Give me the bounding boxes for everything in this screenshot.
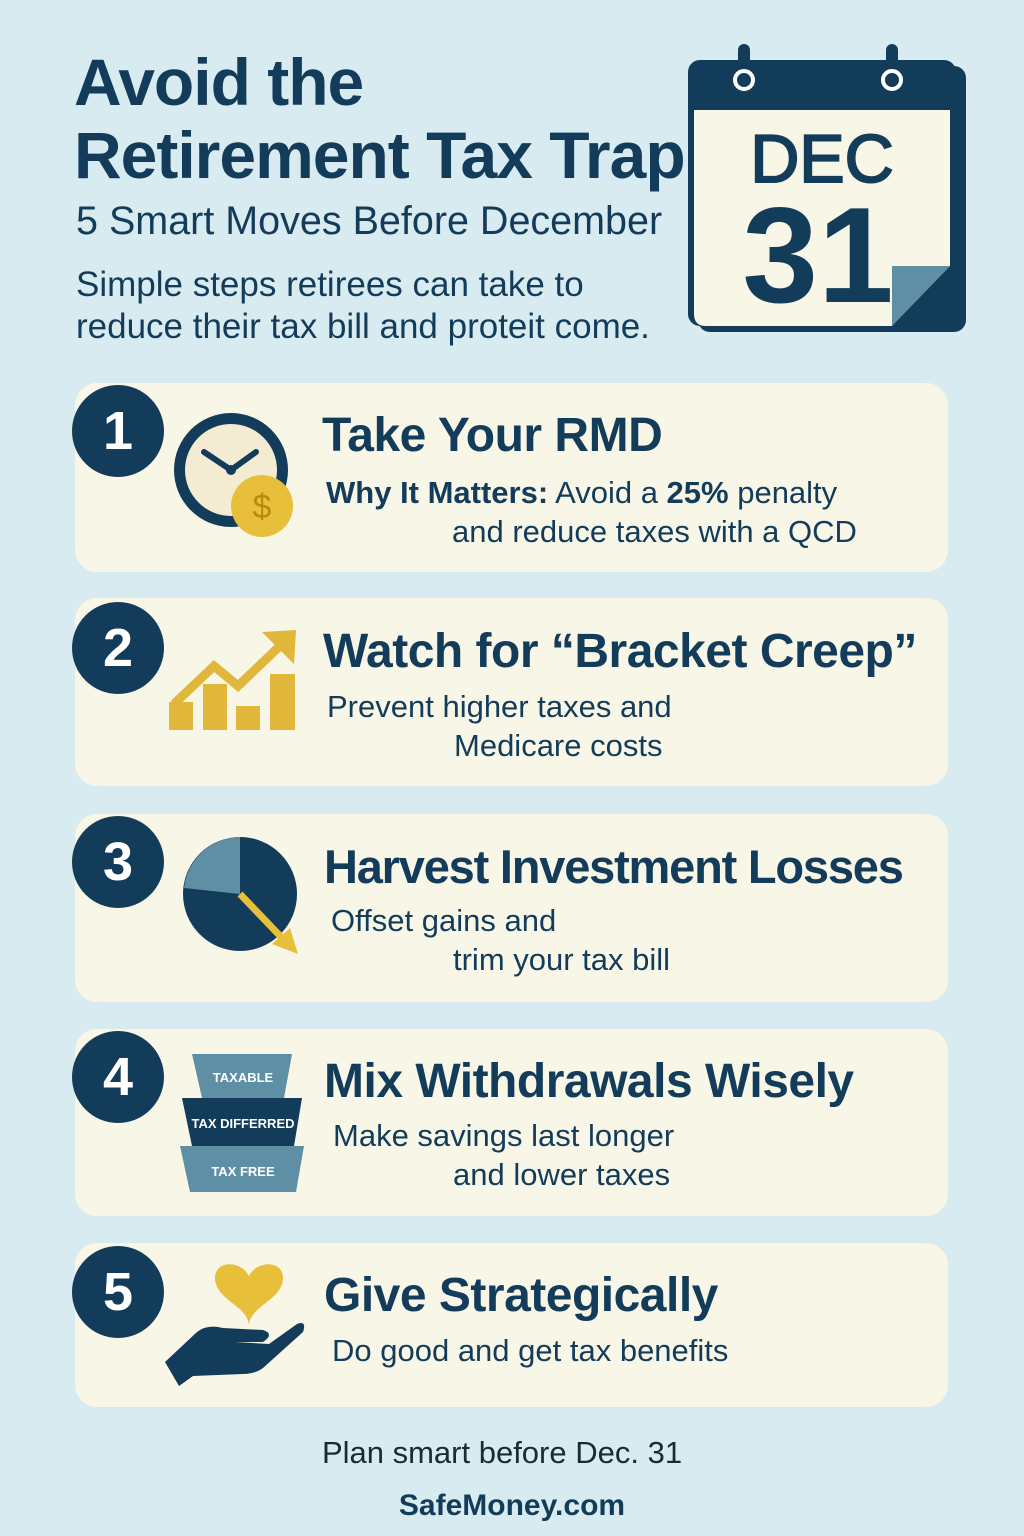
icon: clock with coin <box>174 413 293 537</box>
text 4 <box>333 1118 674 1192</box>
heading 2: Watch for “Bracket Creep” <box>323 625 917 678</box>
heading 1: Take Your RMD <box>322 409 662 462</box>
panel: 1 <box>75 383 948 572</box>
title: Retirement Tax Trap <box>74 118 685 192</box>
badge 5 <box>72 1246 164 1338</box>
text 1: and reduce taxes with a QCD <box>452 514 857 549</box>
heading 5: Give Strategically <box>324 1269 718 1322</box>
heading 4: Mix Withdrawals Wisely <box>324 1055 854 1108</box>
footer tagline: Plan smart before Dec. 31 <box>322 1435 682 1470</box>
badge 5: 5 <box>103 1262 133 1322</box>
text 3: Offset gains and <box>331 903 556 938</box>
panel: 3 <box>75 814 948 1002</box>
text 1 <box>326 475 857 549</box>
panel: 5 <box>75 1243 948 1407</box>
icon: calendar: 31 <box>742 179 894 331</box>
badge 4: 4 <box>103 1047 133 1107</box>
text 2: Medicare costs <box>454 728 662 763</box>
icon: stacked buckets: TAX DIFFERRED <box>191 1116 295 1131</box>
icon: calendar: DEC <box>750 121 894 197</box>
badge 1: 1 <box>103 401 133 461</box>
heading 3: Harvest Investment Losses <box>324 840 903 893</box>
badge 2: 2 <box>103 618 133 678</box>
title: Avoid the <box>74 45 363 119</box>
panel: 4 <box>75 1029 948 1216</box>
intro text: Simple steps retirees can take to <box>76 265 584 304</box>
badge 2 <box>72 602 164 694</box>
text 1: Why It Matters: Avoid a 25% penalty <box>326 475 837 510</box>
footer website: SafeMoney.com <box>399 1489 625 1522</box>
icon: stacked buckets: TAXABLE <box>213 1070 274 1085</box>
text 4: and lower taxes <box>453 1157 670 1192</box>
icon: calendar <box>688 44 966 332</box>
badge 3 <box>72 816 164 908</box>
icon: pie chart <box>183 837 298 954</box>
icon: stacked buckets: TAX FREE <box>211 1164 275 1179</box>
icon: clock with coin: $ <box>253 488 272 526</box>
icon: hand with heart <box>165 1264 304 1386</box>
icon: stacked buckets <box>180 1054 304 1192</box>
text 5: Do good and get tax benefits <box>332 1333 728 1368</box>
badge 3: 3 <box>103 832 133 892</box>
subtitle: 5 Smart Moves Before December <box>76 199 662 243</box>
text 2 <box>327 689 672 763</box>
intro text <box>76 265 650 346</box>
text 4: Make savings last longer <box>333 1118 674 1153</box>
badge 4 <box>72 1031 164 1123</box>
icon: bar chart arrow <box>169 630 296 730</box>
intro text: reduce their tax bill and proteit come. <box>76 307 650 346</box>
text 3: trim your tax bill <box>453 942 670 977</box>
panel: 2 <box>75 598 948 786</box>
text 2: Prevent higher taxes and <box>327 689 672 724</box>
badge 1 <box>72 385 164 477</box>
text 3 <box>331 903 670 977</box>
title <box>74 45 685 192</box>
